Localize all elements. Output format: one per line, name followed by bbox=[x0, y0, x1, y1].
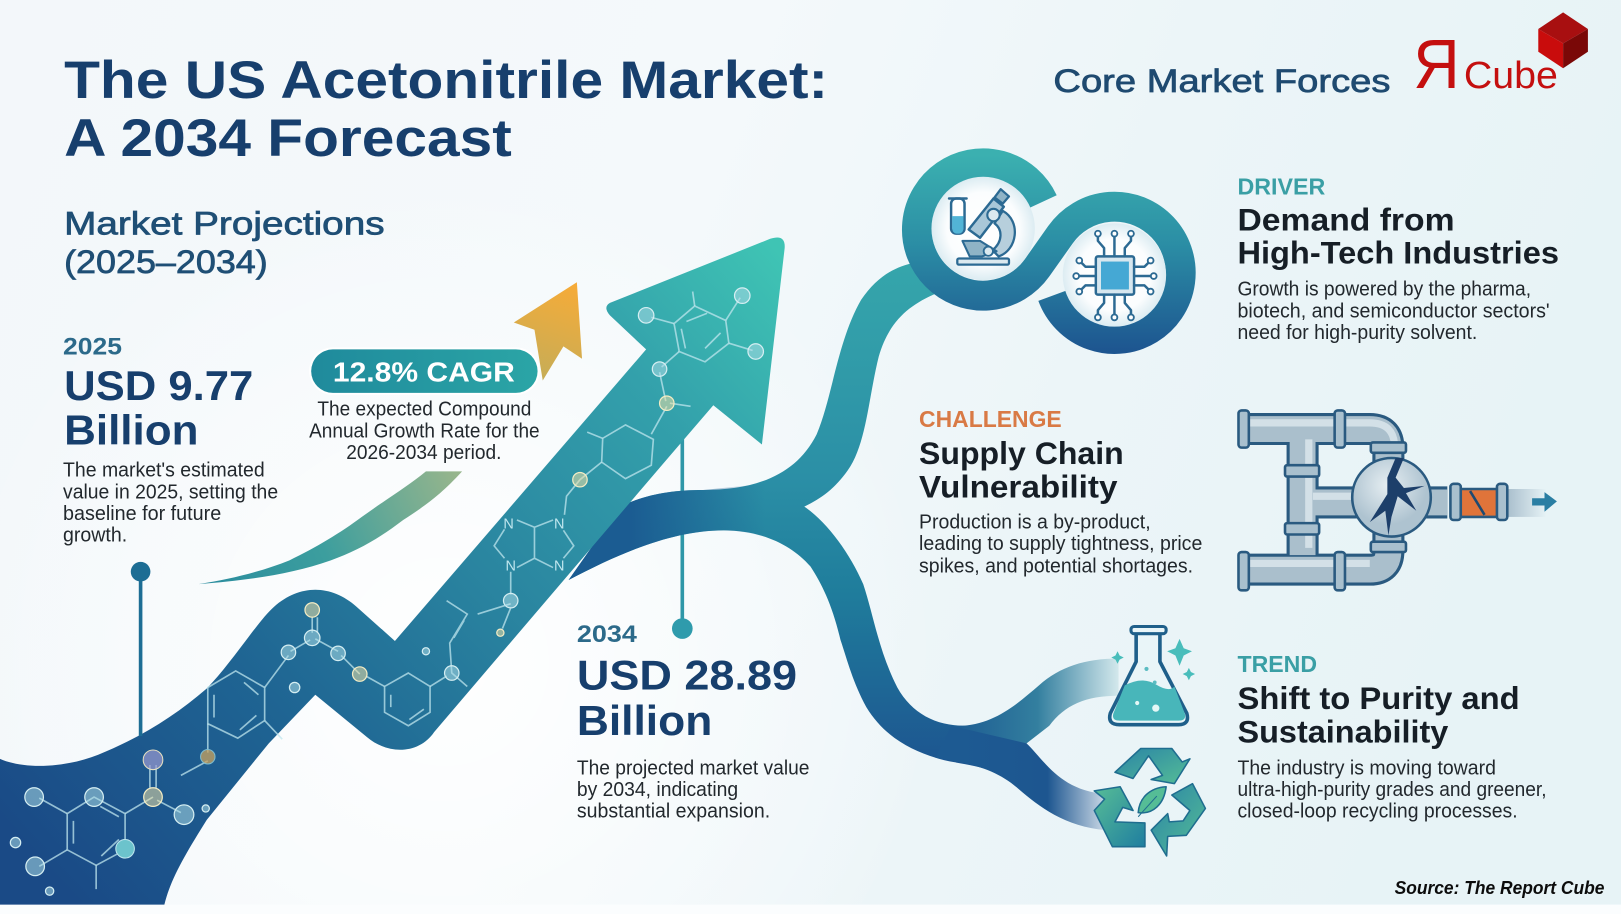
icon: cracked pipe bbox=[1238, 410, 1557, 590]
heading: core market forces: Core Market Forces bbox=[1053, 63, 1390, 99]
molecules on arrow: N bbox=[503, 516, 514, 532]
stat: 2025 value: value in 2025, setting the bbox=[63, 481, 278, 503]
stat: 2034 value: substantial expansion. bbox=[577, 801, 770, 823]
panel: driver: DRIVER bbox=[1237, 173, 1325, 199]
panel: trend: Shift to Purity and bbox=[1237, 681, 1520, 716]
molecules on arrow: N bbox=[554, 559, 565, 575]
chart: rising growth arrow bbox=[0, 237, 785, 905]
panel: trend: The industry is moving toward bbox=[1237, 757, 1496, 779]
stat: 2034 value: Billion bbox=[577, 698, 712, 744]
pin: 2034 marker stem bbox=[672, 434, 693, 639]
title bbox=[64, 51, 828, 168]
heading: market projections bbox=[64, 206, 385, 280]
title: The US Acetonitrile Market: bbox=[64, 51, 828, 110]
logo: RCube bbox=[1413, 12, 1588, 103]
text: CAGR description bbox=[309, 399, 540, 464]
panel: driver: biotech, and semiconductor sectors' bbox=[1237, 300, 1550, 322]
panel: challenge: Supply Chain bbox=[919, 436, 1124, 471]
badge: CAGR pill bbox=[309, 347, 540, 395]
stat: 2034 value: 2034 bbox=[577, 621, 638, 648]
stat: 2025 value: USD 9.77 bbox=[64, 363, 253, 409]
stat: 2025 value: growth. bbox=[63, 525, 127, 547]
panel: trend bbox=[1237, 651, 1547, 823]
ribbon: market forces branches bbox=[569, 263, 1119, 830]
panel: challenge bbox=[919, 406, 1202, 578]
panel: driver: High-Tech Industries bbox=[1237, 236, 1559, 271]
title: A 2034 Forecast bbox=[64, 109, 512, 168]
panel: trend: Sustainability bbox=[1237, 714, 1449, 749]
molecules on arrow: N bbox=[554, 516, 565, 532]
text: CAGR description: The expected Compound bbox=[317, 399, 531, 421]
icon: flask with sparkles bbox=[1110, 626, 1195, 725]
icon: infinity ring bbox=[917, 163, 1181, 339]
panel: challenge: CHALLENGE bbox=[919, 406, 1062, 432]
panel: challenge: Vulnerability bbox=[919, 469, 1118, 504]
stat: 2034 value: by 2034, indicating bbox=[577, 779, 738, 801]
heading: market projections: (2025–2034) bbox=[64, 244, 268, 280]
panel: driver bbox=[1237, 173, 1559, 344]
panel: challenge: Production is a by-product, bbox=[919, 511, 1151, 533]
icon: test tube and microscope bbox=[949, 189, 1015, 265]
icon: recycling arrows with leaf bbox=[1094, 748, 1205, 856]
badge: CAGR pill: 12.8% CAGR bbox=[333, 356, 515, 387]
panel: trend: TREND bbox=[1237, 651, 1317, 677]
panel: challenge: spikes, and potential shortages. bbox=[919, 556, 1193, 578]
panel: driver: need for high-purity solvent. bbox=[1237, 322, 1477, 344]
heading: market projections: Market Projections bbox=[64, 206, 385, 242]
text: CAGR description: 2026-2034 period. bbox=[346, 442, 501, 464]
pin: 2025 marker bbox=[131, 562, 150, 736]
molecules on arrow bbox=[10, 288, 763, 895]
icon: circuit chip bbox=[1073, 231, 1157, 320]
icon: orange growth arrow bbox=[514, 282, 582, 380]
stat: 2025 value bbox=[63, 334, 278, 547]
stat: 2034 value: The projected market value bbox=[577, 757, 809, 779]
stat: 2034 value bbox=[577, 621, 809, 823]
molecules on arrow: N bbox=[505, 559, 516, 575]
logo: RCube: Я bbox=[1413, 25, 1460, 103]
source note: Source: The Report Cube bbox=[1395, 878, 1604, 898]
swoosh: growth curve bbox=[198, 471, 462, 584]
panel: challenge: leading to supply tightness, price bbox=[919, 533, 1202, 555]
logo: RCube: Cube bbox=[1464, 54, 1558, 97]
stat: 2025 value: baseline for future bbox=[63, 503, 221, 525]
stat: 2034 value: USD 28.89 bbox=[577, 653, 797, 699]
stat: 2025 value: Billion bbox=[64, 408, 198, 454]
panel: driver: Demand from bbox=[1237, 203, 1455, 238]
stat: 2025 value: 2025 bbox=[63, 334, 122, 361]
stat: 2025 value: The market's estimated bbox=[63, 460, 265, 482]
panel: trend: closed-loop recycling processes. bbox=[1237, 801, 1518, 823]
panel: trend: ultra-high-purity grades and greener, bbox=[1237, 779, 1547, 801]
panel: driver: Growth is powered by the pharma, bbox=[1237, 279, 1531, 301]
text: CAGR description: Annual Growth Rate for the bbox=[309, 420, 540, 442]
